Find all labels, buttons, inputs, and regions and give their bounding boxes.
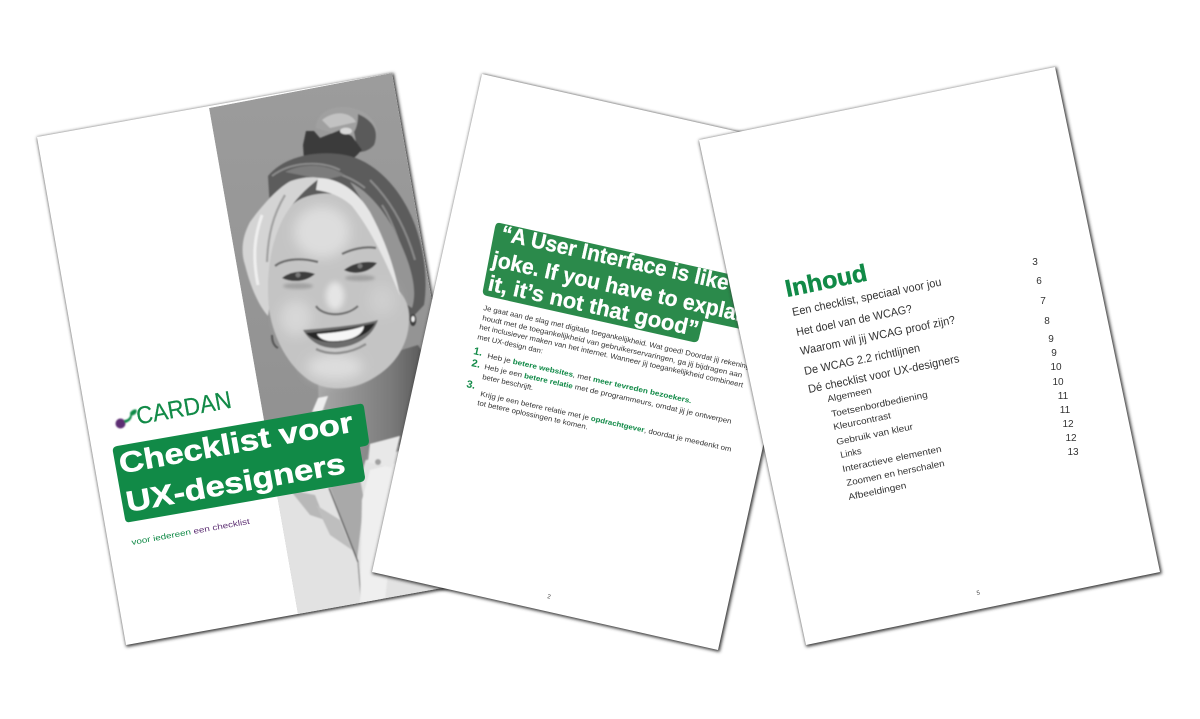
numbered list: 1. [472,345,484,359]
page 3: table of contents [699,67,1161,646]
earrings [410,314,416,326]
nose [326,282,344,310]
page numbers column: 8 [1044,316,1050,327]
mouth [303,320,378,348]
contents list: Een checklist, speciaal voor jou [791,277,942,319]
cover title label: UX-designers [124,448,348,519]
contents list: De WCAG 2.2 richtlijnen [803,342,921,378]
page numbers column: 11 [1060,405,1071,416]
numbered list: Heb je een betere relatie met de programmeurs, omdat jij je ontwerpen [484,362,733,426]
page number 5: 5 [976,590,981,597]
shirt [278,450,442,614]
page numbers column: 11 [1058,391,1069,402]
contents list: Interactieve elementen [841,444,942,474]
contents list: Kleurcontrast [832,410,892,432]
contents list: Waarom wil jij WCAG proof zijn? [799,314,956,358]
neck and collar area [318,344,421,469]
page numbers column: 3 [1032,257,1038,268]
cover title label [113,404,369,522]
page numbers column: 10 [1052,377,1064,388]
numbered list: tot betere oplossingen te komen. [477,398,589,431]
numbered list: beter beschrijft. [482,372,534,392]
quote label: “A User Interface is like a [499,220,749,299]
blond hair left [243,177,320,316]
eyes [282,272,315,281]
page numbers column: 9 [1048,334,1054,345]
numbered list [465,345,733,454]
page numbers column: 12 [1065,433,1077,444]
numbered list: Krijg je een betere relatie met je opdrachtgever , doordat je meedenkt om [480,389,732,454]
contents list: Algemeen [826,385,872,404]
numbered list: 3. [465,378,477,392]
contents list: Dé checklist voor UX-designers [807,353,961,396]
page number 2: 2 [547,594,552,601]
page numbers column: 6 [1036,276,1042,287]
quote label [483,220,760,342]
contents list: Toetsenbordbediening [830,389,928,419]
page numbers column: 9 [1051,348,1057,359]
eyebrows [275,259,318,266]
cover subtitle: voor iedereen een checklist [131,517,251,547]
intro paragraph: het inclusiever maken van het internet. Wanneer jij toegankelijkheid combineert [479,322,744,389]
hair back dark [268,153,426,322]
numbered list: 2. [470,357,482,371]
quote label: joke. If you have to explain [489,246,757,329]
blond fringe strand [316,178,400,296]
intro paragraph: met UX-design dan: [477,332,544,355]
page numbers column: 13 [1067,447,1079,458]
logo: Cardan: CARDAN [134,387,234,430]
quote label: it, it’s not that good” [486,270,701,341]
intro paragraph: houdt met de toegankelijkheid van gebruikerservaringen, ga jij bijdragen aan [482,313,743,380]
page 1: cover [37,73,490,646]
numbered list: Heb je betere websites , met meer tevreden bezoekers. [487,351,693,405]
page numbers column [1032,257,1079,458]
page numbers column: 7 [1040,296,1046,307]
contents list: Het doel van de WCAG? [795,303,913,339]
face [268,194,409,388]
page numbers column: 12 [1062,419,1074,430]
page 2: quote page [372,74,829,651]
page numbers column: 10 [1050,362,1062,373]
heading: Inhoud: Inhoud [783,260,870,303]
intro paragraph: Je gaat aan de slag met digitale toegankelijkheid. Wat goed! Doordat jij rekening [483,303,751,371]
cover photo: smiling woman [209,73,442,614]
contents list: Links [839,446,863,460]
contents list [791,277,961,502]
hair bun [316,107,377,153]
contents list: Gebruik van kleur [835,421,914,447]
contents list: Zoomen en herschalen [845,458,945,488]
hair strands [271,162,416,260]
contents list: Afbeeldingen [847,480,907,502]
cover title label: Checklist voor [117,407,355,480]
intro paragraph [477,303,751,389]
logo icon [116,409,137,428]
